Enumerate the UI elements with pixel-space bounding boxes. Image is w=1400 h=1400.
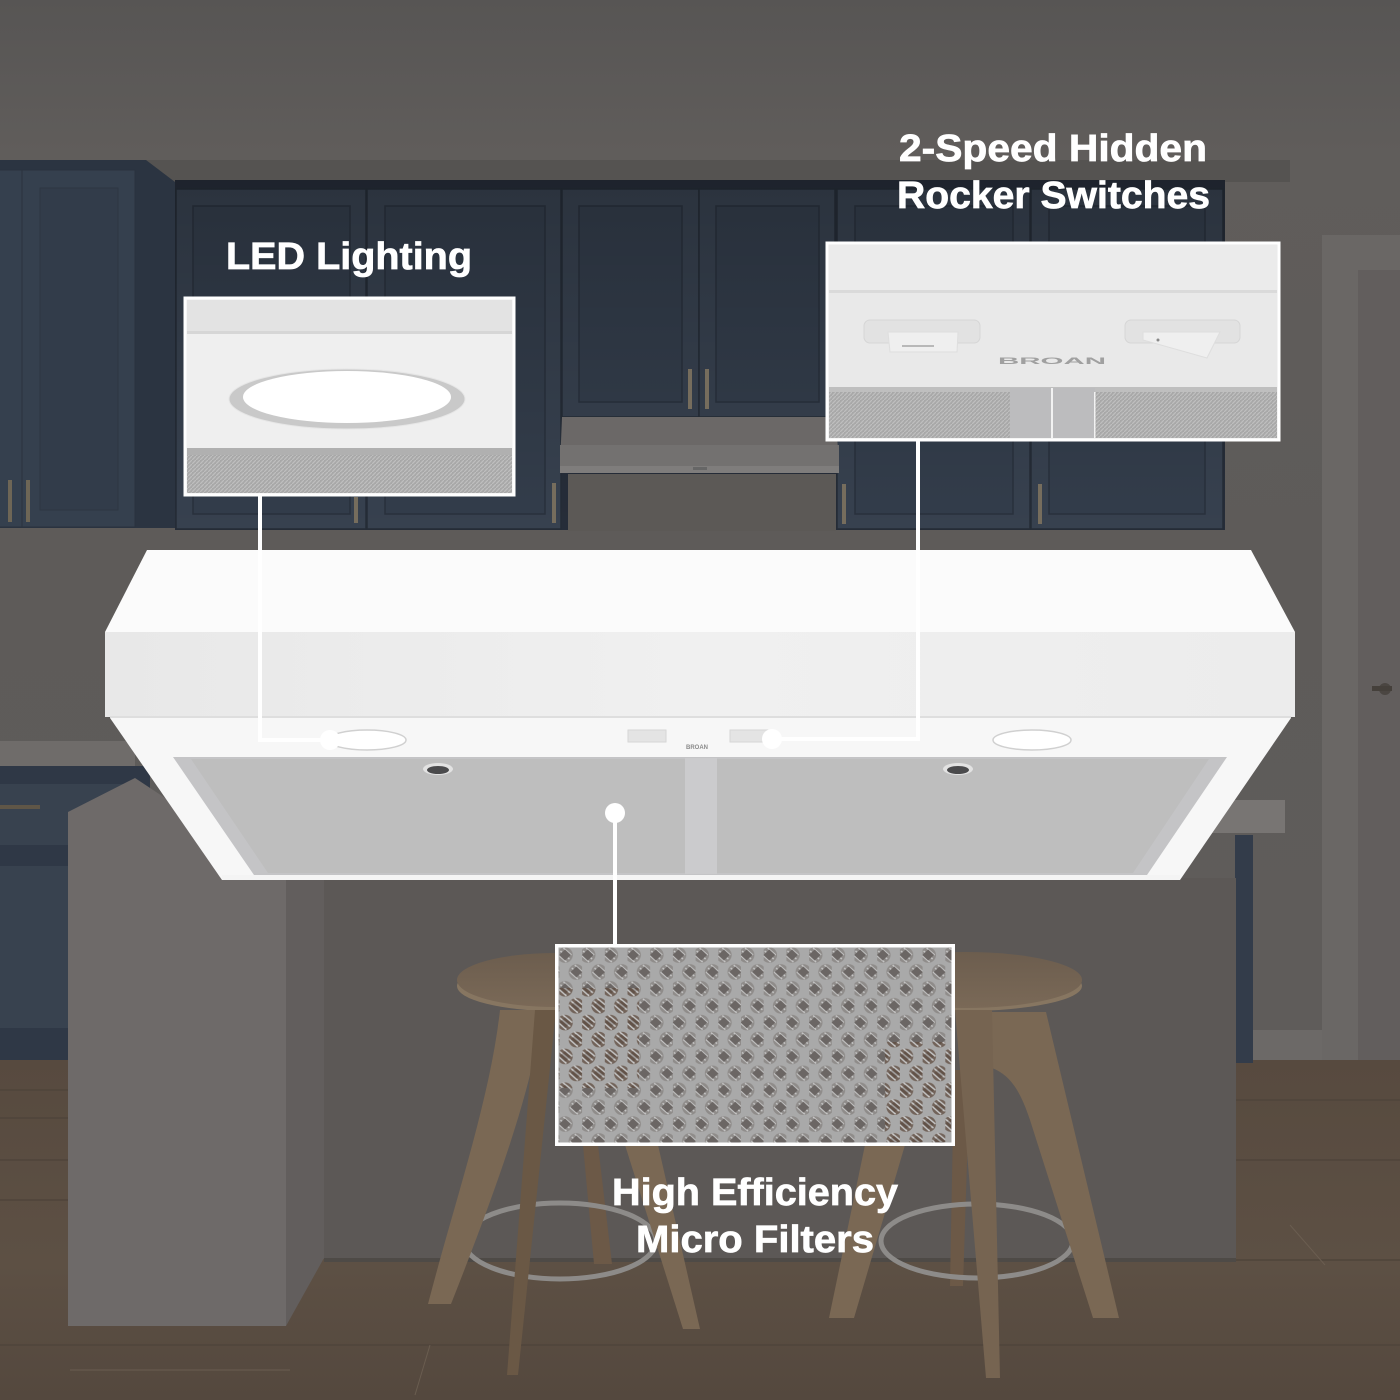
- hood: filter frame: [173, 757, 1227, 875]
- left rocker detail: [864, 320, 980, 352]
- hood: right rocker switch: [730, 730, 768, 742]
- callout panel: micro filter close-up: [556, 946, 954, 1144]
- left stool: [428, 953, 700, 1375]
- background: distant hood: [560, 417, 839, 473]
- hood: front band: [105, 632, 1295, 717]
- hood: lower body: [110, 718, 1291, 880]
- heading: High Efficiency Micro Filters: High Efficiency: [612, 1172, 898, 1214]
- right rocker detail: [1125, 320, 1240, 358]
- hood: right vent: [943, 763, 973, 775]
- hood: top panel: [105, 550, 1295, 632]
- background: right door: [1245, 235, 1400, 1066]
- background: upper cabinets: [175, 180, 1225, 530]
- background: island front: [68, 778, 286, 1326]
- hood: left rocker switch: [628, 730, 666, 742]
- connector: rocker switches: [762, 440, 918, 749]
- heading: High Efficiency Micro Filters: Micro Filters: [636, 1219, 874, 1261]
- hood: front lip: [222, 875, 1180, 880]
- hood: center filter bar: [685, 758, 717, 874]
- hood: right LED light: [993, 730, 1071, 750]
- heading: 2-Speed Hidden Rocker Switches: [897, 128, 1210, 217]
- background: right counter and cabinet: [1180, 800, 1285, 1063]
- background: left tall cabinet: [0, 160, 175, 528]
- hood: left vent: [423, 763, 453, 775]
- background: left base cabinet and counter: [0, 741, 150, 1060]
- background: crown soffit: [146, 160, 1290, 182]
- connector: LED lighting: [260, 495, 340, 750]
- right stool: [829, 952, 1119, 1378]
- background: backsplash under distant hood: [568, 474, 836, 531]
- callout panel: LED lighting: [185, 298, 514, 495]
- main range hood: [105, 550, 1295, 880]
- callout panel: rocker switches: [827, 243, 1279, 440]
- background: island recess: [286, 878, 1236, 1326]
- connector: micro filters: [605, 803, 625, 946]
- heading: LED Lighting: LED Lighting: [226, 236, 472, 278]
- brand mark detail: BROAN: [998, 356, 1106, 366]
- hood: left filter: [191, 759, 685, 873]
- hood: front edge: [110, 716, 1291, 718]
- hood: brand mark: BROAN: [686, 745, 708, 751]
- hood: right filter: [717, 759, 1209, 873]
- background: floor: [0, 1060, 1400, 1400]
- heading: 2-Speed Hidden Rocker Switches: Rocker Switches: [897, 175, 1210, 217]
- heading: 2-Speed Hidden Rocker Switches: 2-Speed Hidden: [899, 128, 1207, 170]
- heading: High Efficiency Micro Filters: [612, 1172, 898, 1261]
- hood: left LED light: [328, 730, 406, 750]
